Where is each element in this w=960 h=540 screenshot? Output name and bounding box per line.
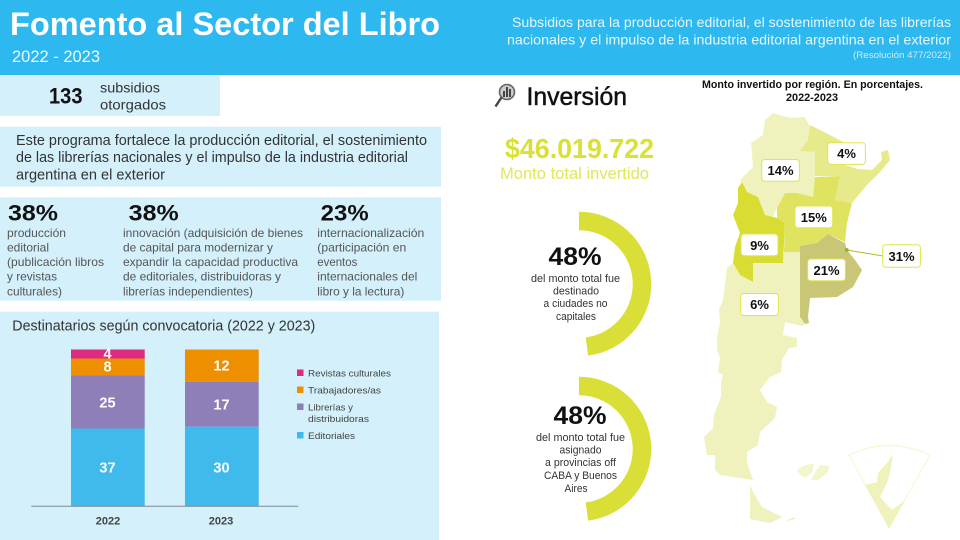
legend <box>297 368 391 442</box>
stat: produccion editorial: editorial <box>7 240 49 254</box>
stat: produccion editorial: (publicación libros <box>7 255 104 269</box>
chart heading: Destinatarios según convocatoria (2022 y 2023) <box>12 319 315 335</box>
axis: 2023 <box>209 515 233 527</box>
legend: Trabajadores/as <box>308 385 381 396</box>
stat: internacionalizacion: internacionalización <box>317 226 424 240</box>
donut: provincias: Aires <box>564 483 588 495</box>
stat: produccion editorial: culturales) <box>7 284 62 298</box>
region: noreste <box>800 125 890 203</box>
stat: internacionalizacion: (participación en <box>317 240 406 254</box>
panel: destinatarios chart <box>0 312 439 540</box>
region: patagonia <box>704 252 805 480</box>
stat: innovacion: librerías independientes) <box>123 284 253 298</box>
map labels: 15% <box>801 210 827 225</box>
map heading: Monto invertido por región. En porcentajes. <box>702 79 923 91</box>
stat: internacionalizacion: libro y la lectura) <box>317 284 404 298</box>
header description: nacionales y el impulso de la industria editorial argentina en el exterior <box>507 32 951 48</box>
region: buenos aires <box>800 234 862 324</box>
region: tierra del fuego <box>750 485 795 523</box>
stat: innovacion: innovación (adquisición de bienes <box>123 226 303 240</box>
donut: provincias: 48% <box>554 402 606 430</box>
map: argentina <box>704 113 930 528</box>
bar 2022: 25 <box>99 395 116 411</box>
panel: programa description <box>0 127 441 187</box>
bar 2023 <box>185 350 259 506</box>
map heading <box>702 79 923 104</box>
donut: ciudades no capitales: a ciudades no <box>544 298 608 310</box>
map labels: 21% <box>813 263 840 278</box>
region: malvinas <box>797 464 829 480</box>
map labels <box>741 143 920 316</box>
total amount: $46.019.722 <box>505 133 654 164</box>
stat: innovacion: de editoriales, distribuidoras y <box>123 270 281 284</box>
map heading: 2022-2023 <box>786 92 838 104</box>
panel: subsidios: 133 <box>49 84 82 108</box>
stat: innovacion: de capital para modernizar y <box>123 240 273 254</box>
bar 2022: 4 <box>103 346 112 362</box>
bar 2023: 30 <box>213 460 230 476</box>
connector: caba <box>845 248 883 256</box>
region: cuyo <box>733 182 785 282</box>
stat: produccion editorial: 38% <box>8 201 58 226</box>
donut: provincias: a provincias off <box>545 457 617 469</box>
donut: provincias: del monto total fue <box>536 432 625 444</box>
donut: provincias: asignado <box>560 444 602 456</box>
legend: distribuidoras <box>308 414 369 425</box>
stat: innovacion: expandir la capacidad productiva <box>123 255 298 269</box>
header description: Subsidios para la producción editorial, el sostenimiento de las librerías <box>512 14 951 30</box>
map labels: 14% <box>767 163 794 178</box>
bar 2022: 37 <box>99 461 116 477</box>
legend: Revistas culturales <box>308 368 391 379</box>
panel: subsidios <box>0 76 220 116</box>
map labels: 6% <box>750 297 769 312</box>
stat: produccion editorial: producción <box>7 226 66 240</box>
panel: subsidios: subsidios <box>100 79 160 95</box>
stat: internacionalizacion: 23% <box>321 201 369 226</box>
bar 2023: 17 <box>213 397 230 413</box>
stat: internacionalizacion <box>317 201 424 298</box>
region: centro <box>777 176 852 252</box>
stat: innovacion: 38% <box>129 201 179 226</box>
donut: ciudades no capitales <box>531 221 642 346</box>
donut: ciudades no capitales: 48% <box>548 243 602 271</box>
stat: internacionalizacion: eventos <box>317 255 357 269</box>
header description <box>507 14 951 61</box>
map labels: 4% <box>837 146 856 161</box>
header description: (Resolución 477/2022) <box>853 50 951 61</box>
heading: inversion: Inversión <box>526 83 627 111</box>
donut: ciudades no capitales: capitales <box>556 311 596 323</box>
title: Fomento al Sector del Libro <box>10 6 440 42</box>
stat: innovacion <box>123 201 303 298</box>
panel: subsidios: otorgados <box>100 96 166 112</box>
period: 2022 - 2023 <box>12 47 100 66</box>
stat: produccion editorial: y revistas <box>7 270 57 284</box>
panel: programa description: Este programa fortalece la producción editorial, el sostenimiento <box>16 132 427 149</box>
stat: produccion editorial <box>7 201 104 298</box>
donut: ciudades no capitales: destinado <box>553 286 599 298</box>
bar 2022 <box>71 346 145 506</box>
region: noroeste <box>740 113 815 217</box>
total amount label: Monto total invertido <box>500 165 649 183</box>
map labels: 9% <box>750 238 769 253</box>
axis <box>31 506 298 527</box>
map labels: 31% <box>888 249 915 264</box>
region: antartida <box>849 446 930 528</box>
donut: ciudades no capitales: del monto total fue <box>531 273 620 285</box>
panel: programa description: de las librerías nacionales y el impulso de la industria editorial <box>16 149 408 166</box>
header banner <box>0 0 960 75</box>
legend: Editoriales <box>308 431 355 442</box>
legend: Librerías y <box>308 402 353 413</box>
donut: provincias <box>536 386 642 512</box>
donut: provincias: CABA y Buenos <box>544 470 617 482</box>
axis: 2022 <box>96 515 120 527</box>
stat: internacionalizacion: internacionales del <box>317 270 417 284</box>
icon: magnifier with chart <box>496 84 514 106</box>
panel: programa description: argentina en el exterior <box>16 166 165 184</box>
bar 2023: 12 <box>213 359 230 375</box>
bar 2022: 8 <box>103 360 112 376</box>
panel: categories <box>0 197 441 301</box>
